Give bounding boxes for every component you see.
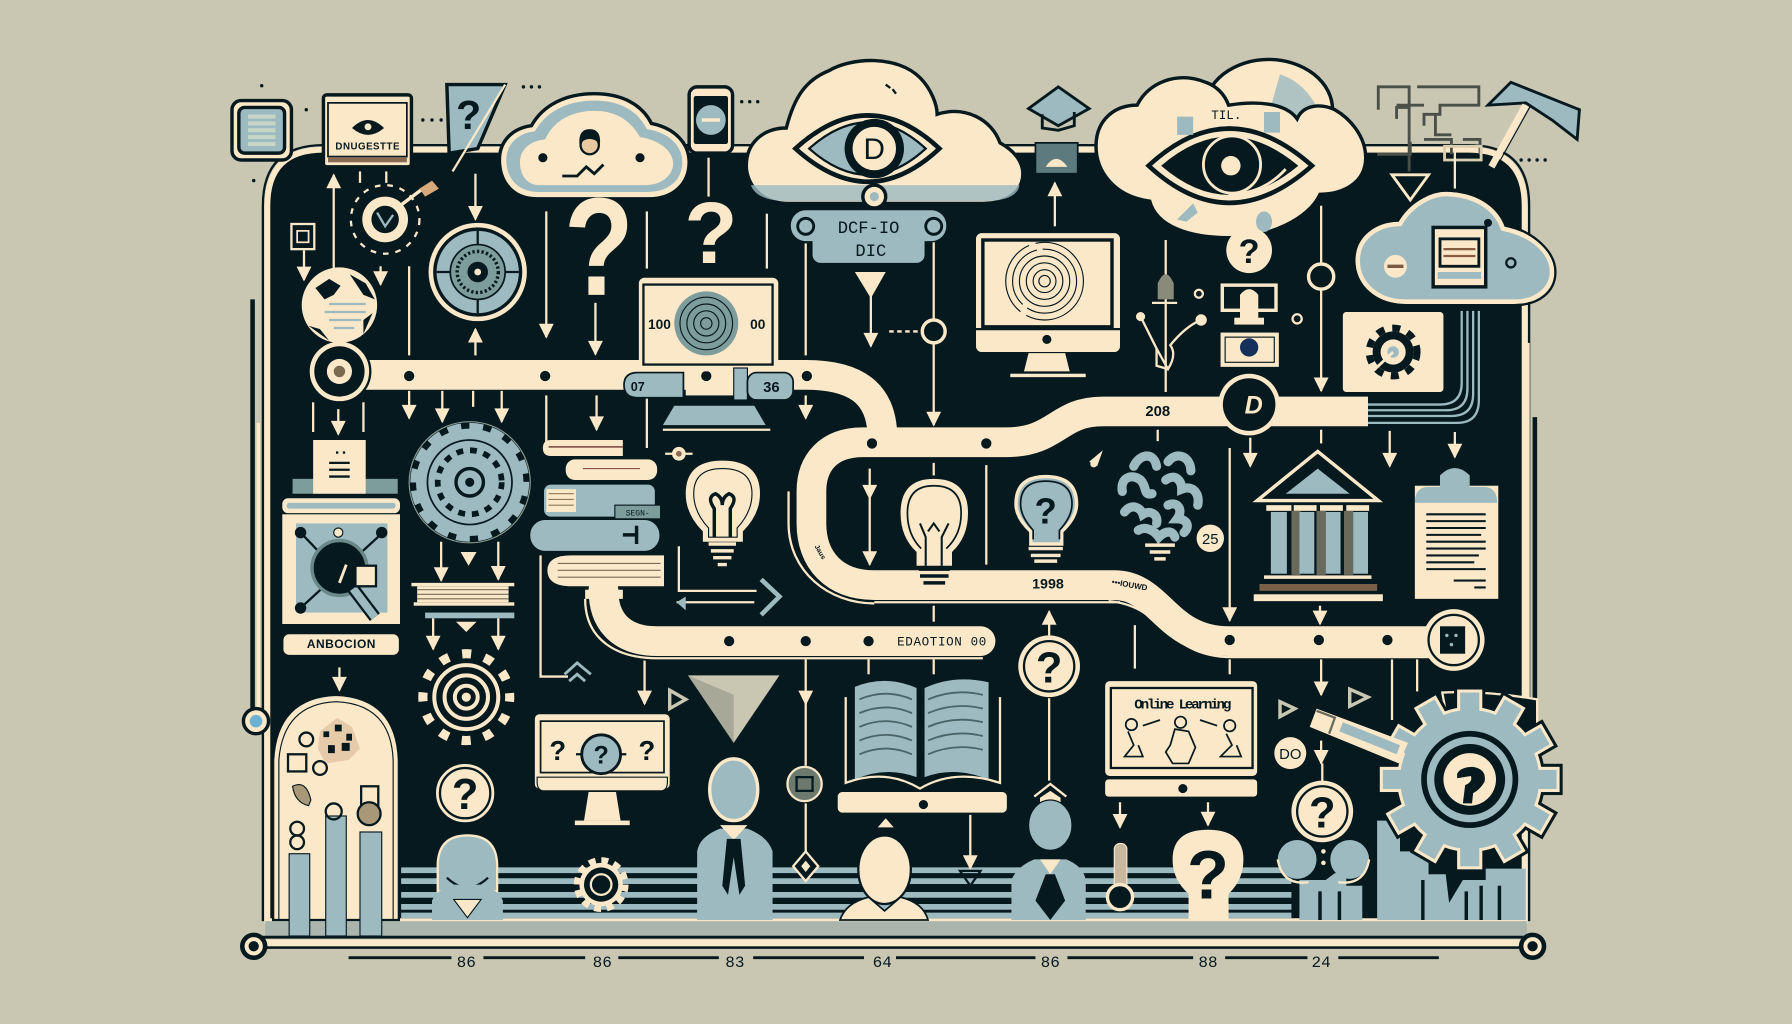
cloud: big eye: TIL. [1211,109,1241,123]
timeline axis with years: 64 [873,954,892,972]
icon: gauge with magnifier [282,514,400,624]
cloud: blue document [1354,191,1555,305]
icon: central computer with fingerprint: 07 [631,380,645,394]
timeline axis with years: 86 [457,954,476,972]
timeline axis with years: 86 [1041,954,1060,972]
question marks [564,170,737,325]
icon: pen [1310,709,1408,763]
icon: small connector [665,447,693,461]
icon: graduation cap [1029,87,1089,130]
eye with D: D [864,133,885,166]
icon: blue gear dial [409,422,530,543]
timeline ribbon lower: EDAOTION 00 [897,636,986,650]
icon: brain [1122,456,1198,559]
icon: question bubble: ? [1239,233,1260,271]
icon: hammer [1488,82,1579,168]
icon: node with diamond [787,767,822,881]
icon: bulb with question: ? [1035,490,1057,531]
icon: central computer with fingerprint: 36 [763,380,780,396]
icon: portrait frames [1221,283,1279,367]
chevron arrow [677,546,779,615]
icon: two people [1278,840,1369,883]
icon: online learning laptop: Online Learning [1134,698,1231,714]
arrows: upper left [304,158,806,448]
icon: monitor with questions: ? [638,735,655,766]
icon: temple [1254,451,1383,601]
cloud: big eye [1096,59,1366,238]
icon: small square [291,224,314,249]
icon: small tablet [232,101,291,160]
small pin [1089,450,1103,467]
icon: lamp and stethoscope [1136,274,1302,369]
timeline axis with years: 88 [1198,954,1218,972]
icon: question circle right [1291,763,1353,842]
icon: bulb with question [1016,477,1077,561]
icon: flat book [411,583,514,606]
label plate: DC-IO DIC [791,185,946,263]
icon: triangle outline [1392,152,1455,200]
arrow below label [338,667,340,690]
icon: monitor box with eye: DNUGESTTE [335,142,400,153]
badge: DO: DO [1279,747,1301,763]
line with circle [1166,206,1334,392]
icon: question circle [435,763,495,823]
question marks: ? [564,170,634,325]
icon: question head [1173,830,1243,920]
label: ANBOCION: ANBOCION [307,637,375,651]
question marks: ? [684,185,737,282]
icon: small tile [1035,143,1078,174]
icon: circuit [1377,87,1481,171]
icon: document printer [282,440,400,513]
icon: central computer with fingerprint: 100 [648,317,671,332]
node: start circle [309,341,370,402]
skyline [1299,821,1526,920]
icon: man in suit [697,759,773,920]
icon: question circle with arrow: ? [1036,644,1062,692]
label plate: DC-IO DIC: DIC [855,243,886,262]
icon: triangles [670,675,779,743]
icon: target sun [423,654,510,741]
small decorative marks [252,84,1547,182]
label plate: DC-IO DIC: DCF-IO [838,220,899,239]
icon: monitor with fingerprint [976,233,1120,377]
icon: question bubble [1226,227,1272,273]
timeline ribbon winding: Jaus [813,544,827,561]
icon: globe [302,267,377,343]
icon: question circle: ? [452,771,478,819]
icon: question circle with arrow [1018,611,1080,781]
icon: light bulb left [686,461,760,565]
eye with D [795,115,939,182]
icon: online learning laptop [1105,681,1257,797]
icon: graduate [1011,784,1086,920]
icon: central computer with fingerprint: 00 [750,317,766,332]
timeline ribbon winding: 208 [1145,404,1170,420]
timeline ribbon lower [585,590,986,658]
cloud: person [499,94,689,199]
timeline ribbon upper [366,371,882,432]
timeline axis with years: 83 [725,954,744,972]
icon: dashed clock [351,181,439,254]
icon: monitor with questions: ? [593,741,609,769]
node: end circle [1423,609,1485,671]
label: ANBOCION [283,634,399,655]
icon: flag with question mark [447,85,505,171]
badge: 25 [1197,525,1224,552]
icon: monitor with questions [535,714,670,825]
icon: gear card [1343,312,1443,392]
icon: question head: ? [1187,836,1229,913]
icon: small triangles right [1280,689,1368,717]
timeline ribbon winding: 1998 [1032,577,1064,593]
blue pipes [1368,311,1479,423]
bottom stripes [401,870,1291,915]
arrows under gear [425,542,514,649]
icon: person bust [840,835,981,920]
badge: DO [1274,737,1306,769]
node: D badge [1218,374,1280,435]
timeline ribbon winding: •••IOUWD [1111,577,1148,593]
arrow up to tile [1054,183,1056,226]
icon: monitor box with eye [323,95,411,167]
side node [243,709,269,734]
timeline ribbon winding [789,404,1429,657]
arrows: right [870,430,1455,869]
arrows: centre top [855,242,945,425]
icon: monitor with questions: ? [549,735,566,766]
icon: small gear [577,861,625,909]
icon: phone [689,87,733,153]
icon: question circle right: ? [1309,789,1336,837]
icon: wheel [429,223,527,321]
node: D badge: D [1245,392,1263,420]
icon: clipboard [1415,468,1498,599]
icon: woman [432,835,503,920]
icon: book stack: SEGN- [626,509,650,518]
icon: central computer with fingerprint [624,278,793,430]
icon: flag with question mark: ? [456,92,481,138]
timeline axis with years: 86 [593,954,612,972]
badge: 25: 25 [1202,532,1219,548]
arrows: lower centre [541,555,869,851]
icon: open book [838,679,1007,827]
icon: book stack [530,440,664,586]
icon: bulb 2 [901,479,968,590]
icon: large gear [1383,692,1557,866]
icon: thermometer [1107,843,1133,910]
eye [1149,129,1312,203]
panel: dark main board [253,145,1535,921]
timeline axis with years: 24 [1312,954,1331,972]
cloud: D eye [746,61,1023,203]
icon: arch with bars [273,695,399,936]
timeline axis with years [242,921,1544,972]
